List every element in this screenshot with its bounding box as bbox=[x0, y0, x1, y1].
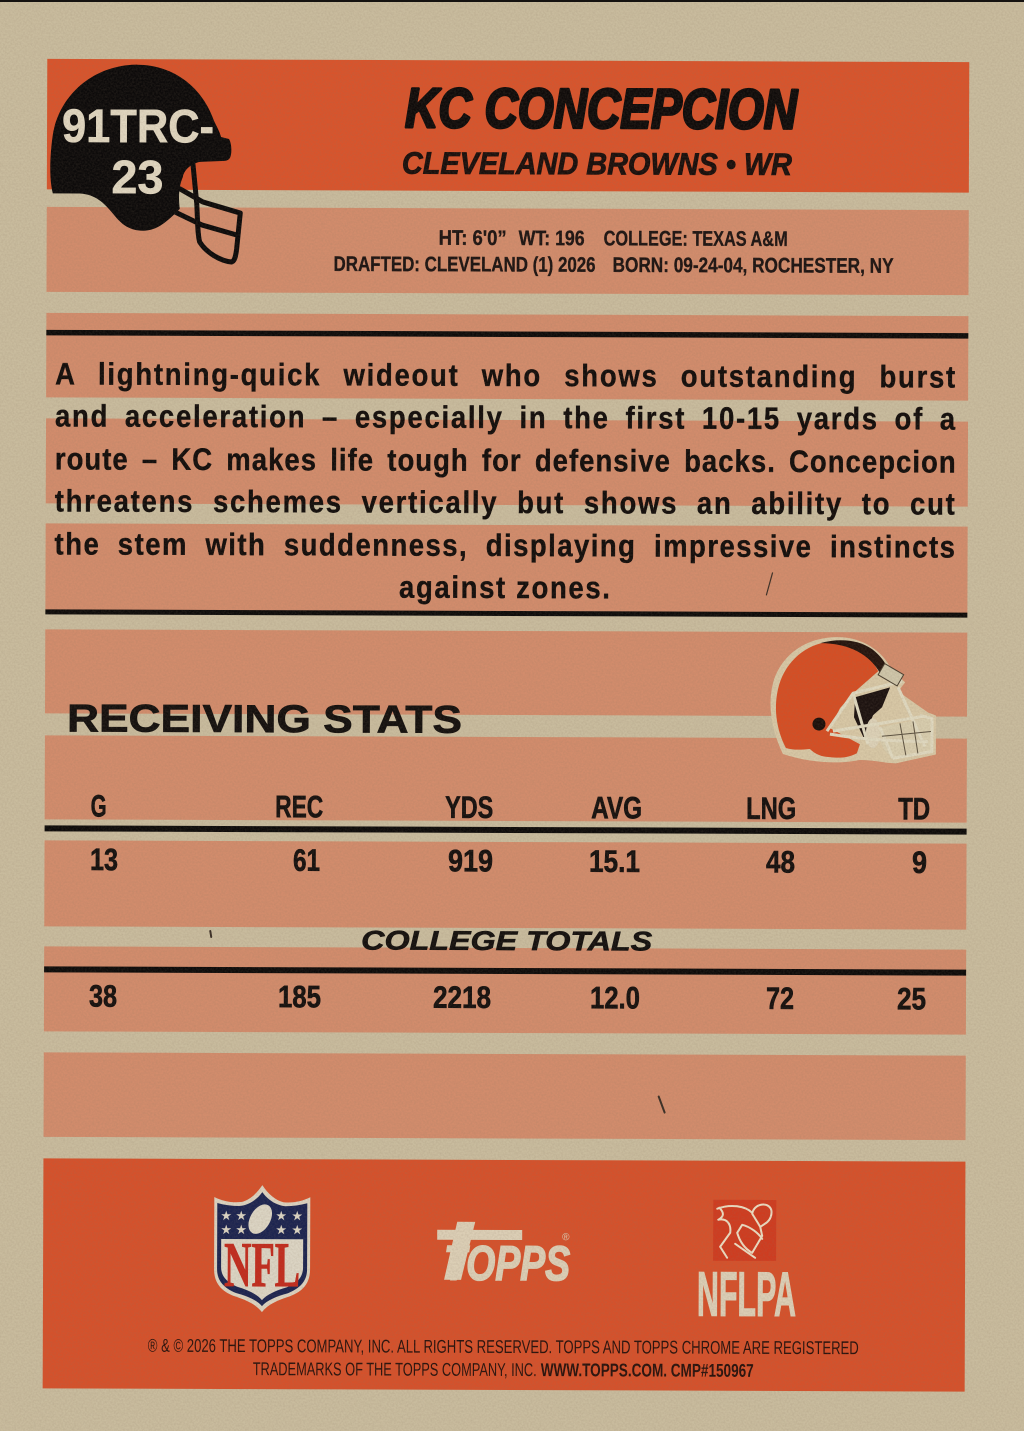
column headers: YDS bbox=[445, 790, 493, 825]
logo: NFL shield: ★ bbox=[291, 1223, 303, 1238]
text block: player bio: threatens schemes vertically but shows an ability to cut bbox=[55, 483, 957, 522]
panel: footer banner bbox=[43, 1158, 965, 1392]
stars: ★ bbox=[220, 1209, 232, 1224]
black rule above bio bbox=[46, 330, 968, 339]
player vitals: COLLEGE: TEXAS A&M bbox=[604, 227, 788, 251]
logo: NFL shield: ★ bbox=[220, 1223, 232, 1238]
season stats row bbox=[90, 842, 927, 880]
logo: Topps: ® bbox=[562, 1232, 570, 1243]
paper flecks bbox=[210, 571, 773, 1113]
text block: player bio: and acceleration – especially in the first 10-15 yards of a bbox=[55, 398, 957, 437]
column headers: REC bbox=[275, 789, 323, 824]
player vitals: HT: 6'0” bbox=[439, 227, 507, 250]
season stats row: 13 bbox=[90, 842, 118, 877]
panel: college totals band bbox=[44, 946, 966, 1035]
college totals row: 2218 bbox=[433, 980, 491, 1015]
text: NFLPA bbox=[697, 1260, 796, 1330]
logo: NFL shield: ★ bbox=[291, 1209, 303, 1224]
college totals heading: COLLEGE TOTALS bbox=[361, 925, 652, 956]
logo: NFL shield: ★ bbox=[235, 1223, 247, 1238]
panel: empty band bbox=[44, 1052, 966, 1140]
college totals row: 12.0 bbox=[590, 980, 640, 1015]
player vitals: DRAFTED: CLEVELAND (1) 2026 bbox=[334, 253, 596, 277]
season stats row: 919 bbox=[448, 843, 493, 878]
college totals row: 72 bbox=[766, 981, 794, 1016]
icon: Cleveland Browns helmet bbox=[770, 637, 936, 763]
panel: vitals band bbox=[46, 207, 969, 295]
college totals row bbox=[89, 979, 926, 1016]
logo: NFLPA bbox=[697, 1200, 796, 1330]
stat table bbox=[89, 789, 930, 1016]
logo: NFL shield: ★ bbox=[235, 1209, 247, 1224]
icon: card number helmet bbox=[50, 64, 241, 262]
college totals row: 185 bbox=[278, 979, 321, 1014]
column headers: G bbox=[91, 789, 107, 824]
panel: bio band top bbox=[46, 313, 968, 401]
logo: Topps: topps bbox=[444, 1217, 570, 1295]
column headers: AVG bbox=[591, 790, 642, 825]
card number: 91TRC- bbox=[62, 99, 214, 152]
player vitals: WT: 196 bbox=[519, 227, 585, 250]
legal copy: TRADEMARKS OF THE TOPPS COMPANY, INC. bbox=[253, 1358, 537, 1380]
panel: stats header band bbox=[45, 735, 967, 823]
panel: season row band bbox=[44, 840, 967, 930]
panel: bio band bottom bbox=[45, 523, 968, 614]
player vitals: BORN: 09-24-04, ROCHESTER, NY bbox=[613, 254, 894, 278]
card number: 23 bbox=[111, 150, 163, 203]
legal copy: WWW.TOPPS.COM. CMP#150967 bbox=[541, 1359, 754, 1381]
season stats row: 48 bbox=[766, 844, 795, 879]
college totals row: 25 bbox=[897, 981, 926, 1016]
column headers bbox=[91, 789, 930, 826]
black rule under stat headers bbox=[45, 825, 967, 835]
text block: player bio bbox=[54, 356, 957, 605]
college totals row: 38 bbox=[89, 979, 117, 1014]
season stats row: 61 bbox=[293, 843, 320, 878]
panel: stats heading band bbox=[45, 629, 967, 717]
player name: KC CONCEPCION bbox=[405, 76, 799, 140]
black rule below bio bbox=[45, 609, 967, 618]
text block: player bio: the stem with suddenness, displaying impressive instincts bbox=[55, 526, 956, 564]
logo: NFL shield: ★ bbox=[275, 1223, 287, 1238]
logo: NFL shield: NFL bbox=[224, 1229, 300, 1300]
panel: bio band middle bbox=[46, 418, 968, 507]
logo: NFL shield: ★ bbox=[275, 1209, 287, 1224]
text block: player bio: against zones. bbox=[399, 570, 612, 605]
logo: NFL shield bbox=[214, 1185, 310, 1312]
panel: name banner bbox=[47, 59, 969, 193]
black rule under college totals bbox=[44, 966, 966, 976]
player vitals bbox=[334, 226, 894, 278]
team and position: CLEVELAND BROWNS • WR bbox=[402, 146, 793, 182]
legal copy bbox=[148, 1335, 859, 1381]
card number bbox=[62, 99, 214, 203]
column headers: LNG bbox=[746, 791, 796, 826]
text block: player bio: route – KC makes life tough for defensive backs. Concepcion bbox=[55, 441, 957, 479]
season stats row: 15.1 bbox=[589, 844, 640, 879]
receiving stats heading: RECEIVING STATS bbox=[67, 697, 462, 742]
text block: player bio: A lightning-quick wideout who shows outstanding burst bbox=[55, 356, 957, 394]
season stats row: 9 bbox=[912, 845, 927, 880]
column headers: TD bbox=[898, 791, 930, 826]
